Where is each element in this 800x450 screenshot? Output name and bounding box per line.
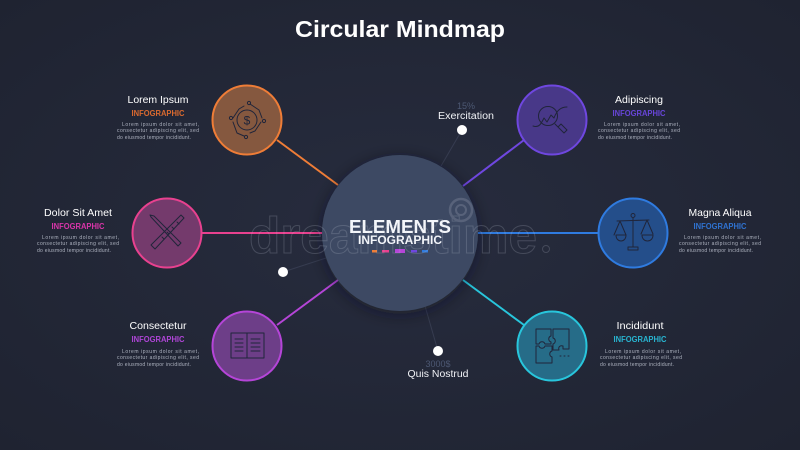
category: INFOGRAPHIC (612, 109, 666, 118)
icon: scales (614, 214, 653, 250)
description: do eiusmod tempor incididunt. (679, 248, 753, 254)
description: consectetur adipiscing elit, sed (37, 241, 119, 247)
description: Lorem ipsum dolor sit amet, (605, 349, 681, 355)
category: INFOGRAPHIC (52, 222, 105, 231)
icon: puzzle (536, 329, 569, 363)
category: INFOGRAPHIC (132, 335, 185, 344)
label: Consectetur (130, 320, 187, 332)
node: Adipiscing (518, 86, 680, 154)
description: Lorem ipsum dolor sit amet, (122, 349, 199, 355)
icon: open book (231, 333, 264, 358)
connector: orange (277, 140, 338, 185)
central circle (322, 155, 478, 311)
label: Lorem Ipsum (128, 94, 189, 106)
description (117, 349, 199, 368)
description: consectetur adipiscing elit, sed (679, 241, 761, 247)
description (598, 122, 680, 141)
description (117, 122, 199, 141)
connector: blue (478, 232, 598, 234)
description (37, 235, 119, 254)
description (679, 235, 761, 254)
description: consectetur adipiscing elit, sed (117, 128, 199, 134)
icon: pencil and ruler (150, 215, 184, 249)
description (600, 349, 682, 368)
description: consectetur adipiscing elit, sed (598, 128, 680, 134)
connector: pink (202, 232, 323, 234)
description: do eiusmod tempor incididunt. (37, 248, 111, 254)
category: INFOGRAPHIC (132, 109, 185, 118)
icon: magnifier chart (533, 106, 567, 133)
description: Lorem ipsum dolor sit amet, (684, 235, 761, 241)
category: INFOGRAPHIC (694, 222, 747, 231)
title: Circular Mindmap (295, 16, 505, 42)
description: consectetur adipiscing elit, sed (117, 355, 199, 361)
connector: cyan (463, 280, 524, 325)
description: Lorem ipsum dolor sit amet, (122, 122, 199, 128)
label: Adipiscing (615, 94, 663, 106)
value: 15% (457, 101, 475, 111)
watermark: dreamstime (249, 207, 537, 264)
color legend dashes (372, 249, 428, 253)
label: Dolor Sit Amet (44, 207, 112, 219)
data point: Exercitation (438, 101, 494, 135)
data point: unlabeled left (278, 267, 288, 277)
label: Exercitation (438, 111, 494, 122)
value: 3000$ (425, 359, 451, 369)
description: do eiusmod tempor incididunt. (598, 135, 672, 141)
label: Quis Nostrud (408, 369, 468, 380)
icon: dollar network: $ (244, 114, 251, 128)
node: Magna Aliqua (598, 198, 761, 268)
description: Lorem ipsum dolor sit amet, (42, 235, 119, 241)
category: INFOGRAPHIC (614, 335, 667, 344)
data point: Quis Nostrud (408, 346, 468, 380)
description: do eiusmod tempor incididunt. (117, 135, 191, 141)
connector: violet (463, 140, 524, 186)
node: Consectetur (117, 312, 282, 380)
description: do eiusmod tempor incididunt. (600, 362, 674, 368)
node: Lorem Ipsum (117, 86, 282, 154)
description: consectetur adipiscing elit, sed (600, 355, 682, 361)
node: Incididunt (518, 312, 682, 380)
node: Dolor Sit Amet (37, 198, 202, 268)
label: Incididunt (616, 320, 664, 332)
label: Magna Aliqua (688, 207, 752, 219)
icon: dollar network (229, 101, 266, 139)
description: do eiusmod tempor incididunt. (117, 362, 191, 368)
connector: purple (277, 280, 338, 325)
description: Lorem ipsum dolor sit amet, (604, 122, 680, 128)
center subheading: INFOGRAPHIC (358, 235, 442, 247)
center heading: ELEMENTS (349, 217, 451, 237)
faint connector lines (283, 130, 462, 351)
